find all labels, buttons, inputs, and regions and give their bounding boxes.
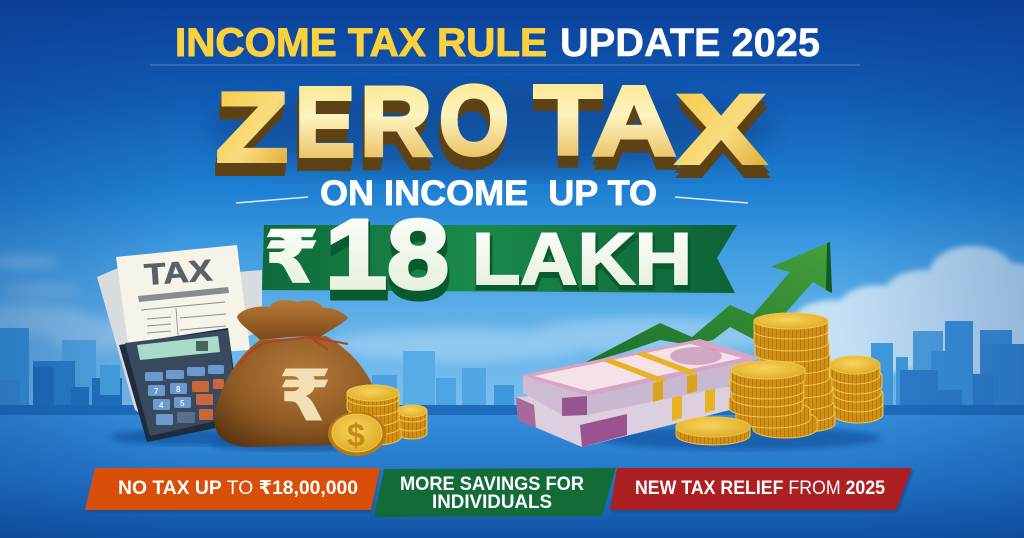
upper bundle bbox=[523, 375, 587, 415]
gold face: A bbox=[592, 66, 676, 176]
bank notes bbox=[516, 339, 760, 447]
bottom banners bbox=[85, 468, 914, 517]
extrusion: A bbox=[593, 74, 677, 184]
extrusion: R bbox=[358, 79, 430, 189]
bag top frill bbox=[237, 300, 348, 340]
gold face: X bbox=[677, 74, 765, 184]
tax form bbox=[116, 245, 250, 358]
flat coin bbox=[676, 417, 750, 445]
calculator bbox=[119, 328, 241, 442]
title gold part: INCOME TAX RULE bbox=[175, 21, 547, 65]
gold face: O bbox=[439, 65, 509, 175]
headline zero tax bbox=[210, 65, 770, 197]
stack back right bbox=[830, 356, 883, 423]
clouds bbox=[0, 246, 1024, 376]
green ribbon amount bbox=[262, 199, 737, 319]
extrusion bbox=[214, 72, 767, 197]
illustration: growth arrow bbox=[580, 242, 832, 365]
rupee on bag: ₹ bbox=[279, 357, 331, 435]
extrusion: E bbox=[294, 75, 354, 185]
title white part: UPDATE 2025 bbox=[560, 21, 820, 65]
gold face: E bbox=[295, 67, 355, 177]
banner: green: MORE SAVINGS FOR bbox=[400, 474, 584, 495]
banner: orange bbox=[85, 468, 380, 512]
amount shadow bbox=[326, 203, 693, 319]
bag body bbox=[214, 336, 375, 447]
subheading on income up to bbox=[236, 174, 748, 213]
stack front bbox=[729, 361, 817, 438]
gold face: Z bbox=[216, 72, 288, 182]
calculator: 8 bbox=[176, 385, 181, 394]
banner: red: NEW TAX RELIEF FROM 2025 bbox=[635, 478, 885, 499]
illustration: coins left bbox=[328, 385, 427, 456]
extrusion: T bbox=[534, 72, 602, 182]
banner: orange: NO TAX UP TO ₹18,00,000 bbox=[118, 478, 358, 499]
keys bbox=[145, 365, 224, 425]
banner: red bbox=[610, 468, 914, 512]
title bbox=[150, 21, 860, 65]
banner: green bbox=[374, 468, 616, 517]
ground bbox=[0, 415, 1024, 538]
calculator: 4 bbox=[159, 401, 164, 410]
calculator: 5 bbox=[180, 399, 185, 408]
gold face: T bbox=[534, 65, 602, 175]
lower bundle bbox=[516, 387, 730, 447]
extrusion: Z bbox=[214, 85, 286, 195]
bag tie bbox=[240, 337, 348, 364]
extrusion: R bbox=[359, 74, 431, 184]
word lakh: LAKH bbox=[472, 219, 692, 300]
extrusion: T bbox=[534, 77, 602, 187]
tax label: TAX bbox=[143, 254, 213, 292]
amount shadow: LAKH bbox=[473, 224, 693, 304]
illustration: coin stacks right bbox=[516, 313, 883, 450]
city skyline bbox=[0, 321, 1024, 418]
extrusion: X bbox=[678, 82, 766, 192]
extrusion: X bbox=[679, 87, 767, 197]
display bbox=[137, 336, 220, 360]
illustration: money bag bbox=[210, 300, 380, 451]
subheading on income up to: ON INCOME UP TO bbox=[320, 174, 657, 213]
amount shadow: 18 bbox=[326, 209, 450, 319]
amount shadow: 18 bbox=[326, 203, 450, 313]
back papers bbox=[97, 268, 150, 420]
extrusion: Z bbox=[215, 80, 287, 190]
gold face bbox=[216, 65, 765, 184]
dollar coin: $ bbox=[347, 417, 365, 453]
stack back centre bbox=[754, 313, 835, 432]
extrusion: E bbox=[293, 80, 353, 190]
ribbon bbox=[262, 225, 737, 293]
extrusion: A bbox=[594, 79, 678, 189]
banner: green: INDIVIDUALS bbox=[432, 492, 552, 513]
calculator: 7 bbox=[154, 387, 159, 396]
gold face: R bbox=[360, 66, 432, 176]
number 18: 18 bbox=[325, 199, 449, 309]
illustration: tax documents and calculator bbox=[97, 245, 270, 445]
extrusion: O bbox=[438, 73, 508, 183]
extrusion: O bbox=[437, 78, 507, 188]
rupee sign: ₹ bbox=[264, 218, 319, 298]
